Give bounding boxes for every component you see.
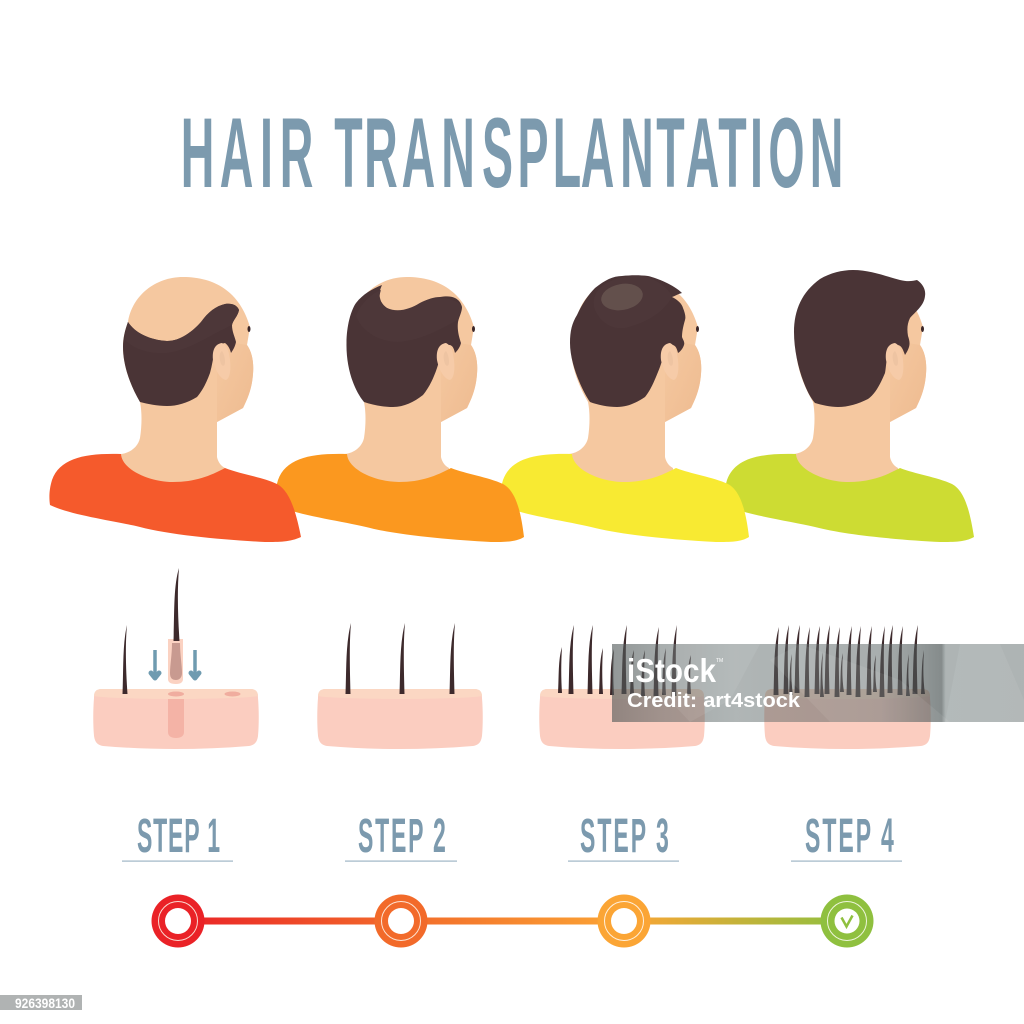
skin top surface bbox=[765, 689, 930, 699]
thinning patch bbox=[599, 281, 645, 313]
step 3 label: STEP 3 bbox=[580, 809, 669, 862]
marker step 1 bbox=[152, 894, 204, 948]
donor hole right bbox=[224, 692, 240, 696]
graft hair bbox=[174, 568, 180, 641]
skin block bbox=[317, 689, 483, 749]
skin: head and neck bbox=[569, 277, 701, 490]
title: HAIR bbox=[181, 99, 313, 209]
ear bbox=[661, 343, 678, 380]
step 4 label: STEP 4 bbox=[805, 809, 894, 862]
skin: head and neck bbox=[121, 277, 253, 490]
donor hole centre bbox=[168, 692, 184, 696]
inner ear bbox=[220, 351, 225, 366]
step 2 label: STEP 2 bbox=[358, 809, 446, 862]
timeline connector bbox=[178, 918, 847, 924]
skin diagram: step 4 bbox=[764, 625, 931, 749]
marker step 4 with check bbox=[820, 894, 874, 948]
inner ear bbox=[668, 351, 673, 366]
ear bbox=[213, 343, 230, 380]
step 1 label: STEP 1 bbox=[137, 809, 220, 862]
shirt bbox=[49, 454, 301, 542]
face shading bbox=[665, 340, 701, 422]
shirt bbox=[500, 454, 749, 542]
eye bbox=[921, 326, 924, 332]
shirt bbox=[724, 454, 974, 542]
face shading bbox=[890, 340, 926, 422]
skin diagram: step 1 bbox=[93, 568, 259, 749]
face shading bbox=[217, 340, 253, 422]
skin top surface bbox=[540, 689, 704, 699]
lighter hair tone bbox=[594, 276, 672, 328]
hair bbox=[123, 304, 239, 406]
arrow right bbox=[191, 650, 199, 678]
skin top surface bbox=[94, 689, 258, 699]
eye bbox=[696, 326, 699, 332]
skin diagram: step 3 bbox=[539, 625, 705, 749]
watermark logo: iStock bbox=[627, 652, 717, 689]
lighter hair tone bbox=[125, 304, 239, 353]
skin top surface bbox=[318, 689, 482, 699]
hair bbox=[346, 285, 462, 407]
eye bbox=[248, 326, 250, 332]
image id tag: 926398130 bbox=[15, 996, 75, 1011]
recipient channel bbox=[168, 699, 184, 738]
existing hair bbox=[122, 625, 128, 694]
marker step 2 bbox=[374, 894, 428, 948]
watermark credit: Credit: art4stock bbox=[627, 690, 801, 712]
inner ear bbox=[893, 351, 898, 366]
arrow left bbox=[151, 650, 159, 678]
eye bbox=[472, 326, 475, 332]
trademark: TM bbox=[716, 658, 723, 664]
lighter hair tone bbox=[356, 290, 461, 342]
timeline bbox=[152, 894, 874, 948]
hairs bbox=[346, 623, 455, 694]
skin block bbox=[93, 689, 259, 749]
title: TRANSPLANTATION bbox=[334, 99, 843, 209]
hairs bbox=[558, 625, 691, 696]
ear bbox=[437, 343, 454, 380]
face shading bbox=[441, 340, 477, 422]
skin block bbox=[764, 689, 931, 749]
hair bbox=[794, 270, 925, 407]
hairs bbox=[774, 625, 925, 697]
figure: man step 4 bbox=[724, 270, 974, 542]
figure: man step 1 bbox=[49, 277, 301, 542]
skin diagram: step 2 bbox=[317, 623, 483, 749]
skin block bbox=[539, 689, 705, 749]
figure: man step 2 bbox=[275, 277, 524, 542]
watermark facets bbox=[660, 644, 1024, 722]
hair bbox=[570, 275, 685, 407]
watermark banner bbox=[612, 644, 1024, 722]
ear bbox=[886, 343, 903, 380]
shirt bbox=[275, 454, 524, 542]
graft follicle bbox=[170, 643, 182, 680]
marker step 3 bbox=[598, 894, 650, 948]
inner ear bbox=[444, 351, 449, 366]
graft sheath bbox=[168, 639, 183, 684]
figure: man step 3 bbox=[500, 275, 749, 542]
skin: head and neck bbox=[794, 277, 926, 490]
skin: head and neck bbox=[345, 277, 477, 490]
